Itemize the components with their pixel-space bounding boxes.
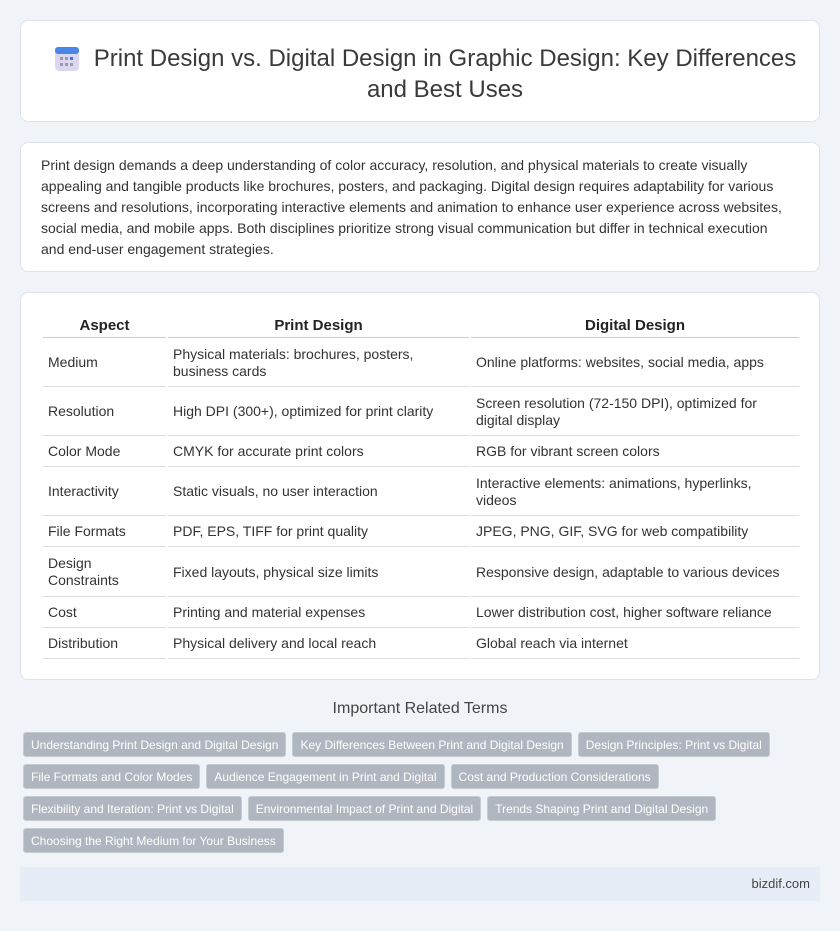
title: Print Design vs. Digital Design in Graphic Design: Key Differences and Best Uses: [94, 45, 796, 103]
comparison table: Medium: [48, 354, 98, 370]
comparison table: Responsive design, adaptable to various devices: [476, 564, 780, 580]
intro text: Print design demands a deep understanding of color accuracy, resolution, and physical materials to create visually appealing and tangible products like brochures, posters, and packaging. Digital design requires adaptability for various screens and resolutions, incorporating interactive elements and animation to enhance user experience across websites, social media, and mobile apps. Both disciplines prioritize strong visual communication but differ in technical execution and end-user engagement strategies.: [41, 157, 782, 257]
comparison table: Aspect: [79, 317, 130, 334]
comparison table: Physical materials: brochures, posters, business cards: [173, 346, 413, 378]
comparison table: Resolution: [48, 403, 114, 419]
comparison table: Cost: [48, 604, 77, 620]
related terms tags: [23, 732, 770, 853]
footer: bizdif.com: [751, 876, 810, 891]
comparison table: Global reach via internet: [476, 635, 628, 651]
comparison table: File Formats: [48, 523, 126, 539]
related terms tags: Trends Shaping Print and Digital Design: [495, 802, 708, 816]
comparison table: Static visuals, no user interaction: [173, 483, 378, 499]
footer: [20, 867, 820, 901]
related terms tags: Cost and Production Considerations: [459, 770, 651, 784]
related terms tags: Audience Engagement in Print and Digital: [214, 770, 437, 784]
comparison table: Interactivity: [48, 483, 119, 499]
comparison table: Distribution: [48, 635, 118, 651]
comparison table: Digital Design: [585, 317, 685, 334]
comparison table: Lower distribution cost, higher software reliance: [476, 604, 772, 620]
comparison table: Color Mode: [48, 443, 120, 459]
comparison table: Printing and material expenses: [173, 604, 365, 620]
comparison table: Interactive elements: animations, hyperlinks, videos: [476, 474, 751, 508]
related terms tags: Understanding Print Design and Digital Design: [31, 738, 278, 752]
related terms heading: Important Related Terms: [333, 700, 507, 717]
related terms tags: Key Differences Between Print and Digital Design: [300, 738, 564, 752]
comparison table: High DPI (300+), optimized for print clarity: [173, 403, 433, 419]
comparison table: Design Constraints: [48, 555, 119, 588]
comparison table: Screen resolution (72-150 DPI), optimized for digital display: [476, 394, 757, 428]
icon: calendar: [55, 47, 79, 71]
comparison table: Online platforms: websites, social media, apps: [476, 354, 764, 370]
related terms tags: Flexibility and Iteration: Print vs Digital: [31, 802, 234, 816]
comparison table: Print Design: [274, 317, 363, 334]
comparison table: [20, 292, 820, 680]
related terms tags: Choosing the Right Medium for Your Business: [31, 834, 276, 848]
comparison table: CMYK for accurate print colors: [173, 443, 364, 459]
comparison table: Fixed layouts, physical size limits: [173, 564, 378, 580]
related terms tags: File Formats and Color Modes: [31, 770, 192, 784]
header card: [20, 20, 820, 122]
comparison table: PDF, EPS, TIFF for print quality: [173, 523, 368, 539]
comparison table: RGB for vibrant screen colors: [476, 443, 660, 459]
comparison table: JPEG, PNG, GIF, SVG for web compatibility: [476, 523, 748, 539]
comparison table: Physical delivery and local reach: [173, 635, 376, 651]
related terms tags: Design Principles: Print vs Digital: [586, 738, 762, 752]
related terms tags: Environmental Impact of Print and Digital: [256, 802, 473, 816]
